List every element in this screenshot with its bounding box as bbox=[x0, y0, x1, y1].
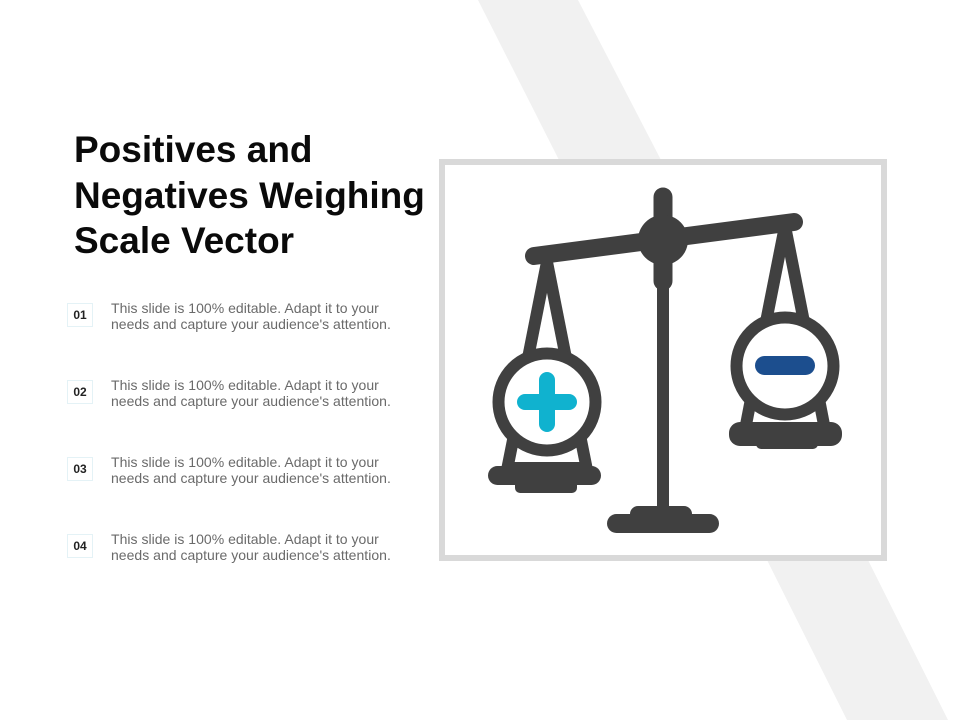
title: Negatives Weighing bbox=[74, 174, 425, 216]
list item 03: 03 bbox=[73, 462, 87, 476]
list item 03: This slide is 100% editable. Adapt it to your bbox=[111, 454, 379, 470]
panel: scale frame bbox=[439, 159, 887, 561]
list item 04: 04 bbox=[73, 539, 87, 553]
list item 02: needs and capture your audience's attention. bbox=[111, 393, 391, 409]
list item 01: 01 bbox=[73, 308, 87, 322]
title: Scale Vector bbox=[74, 220, 294, 261]
list item 01 bbox=[67, 300, 391, 332]
list item 02: This slide is 100% editable. Adapt it to your bbox=[111, 377, 379, 393]
list item 02 bbox=[67, 377, 391, 409]
list item 01: This slide is 100% editable. Adapt it to your bbox=[111, 300, 379, 316]
title: Positives and bbox=[74, 129, 313, 170]
list item 02: 02 bbox=[73, 385, 87, 399]
right pan: negative bbox=[729, 226, 842, 449]
list item 03: needs and capture your audience's attention. bbox=[111, 470, 391, 486]
list item 04 bbox=[67, 531, 391, 563]
icon: plus sign bbox=[517, 372, 577, 432]
list item 01: needs and capture your audience's attention. bbox=[111, 316, 391, 332]
title bbox=[74, 129, 425, 261]
scale beam and pivot bbox=[534, 197, 794, 281]
list item 04: This slide is 100% editable. Adapt it to your bbox=[111, 531, 379, 547]
list item 03 bbox=[67, 454, 391, 486]
scale stand and base bbox=[607, 240, 719, 533]
list item 04: needs and capture your audience's attention. bbox=[111, 547, 391, 563]
icon: minus sign bbox=[755, 356, 815, 375]
left pan: positive bbox=[488, 262, 601, 493]
